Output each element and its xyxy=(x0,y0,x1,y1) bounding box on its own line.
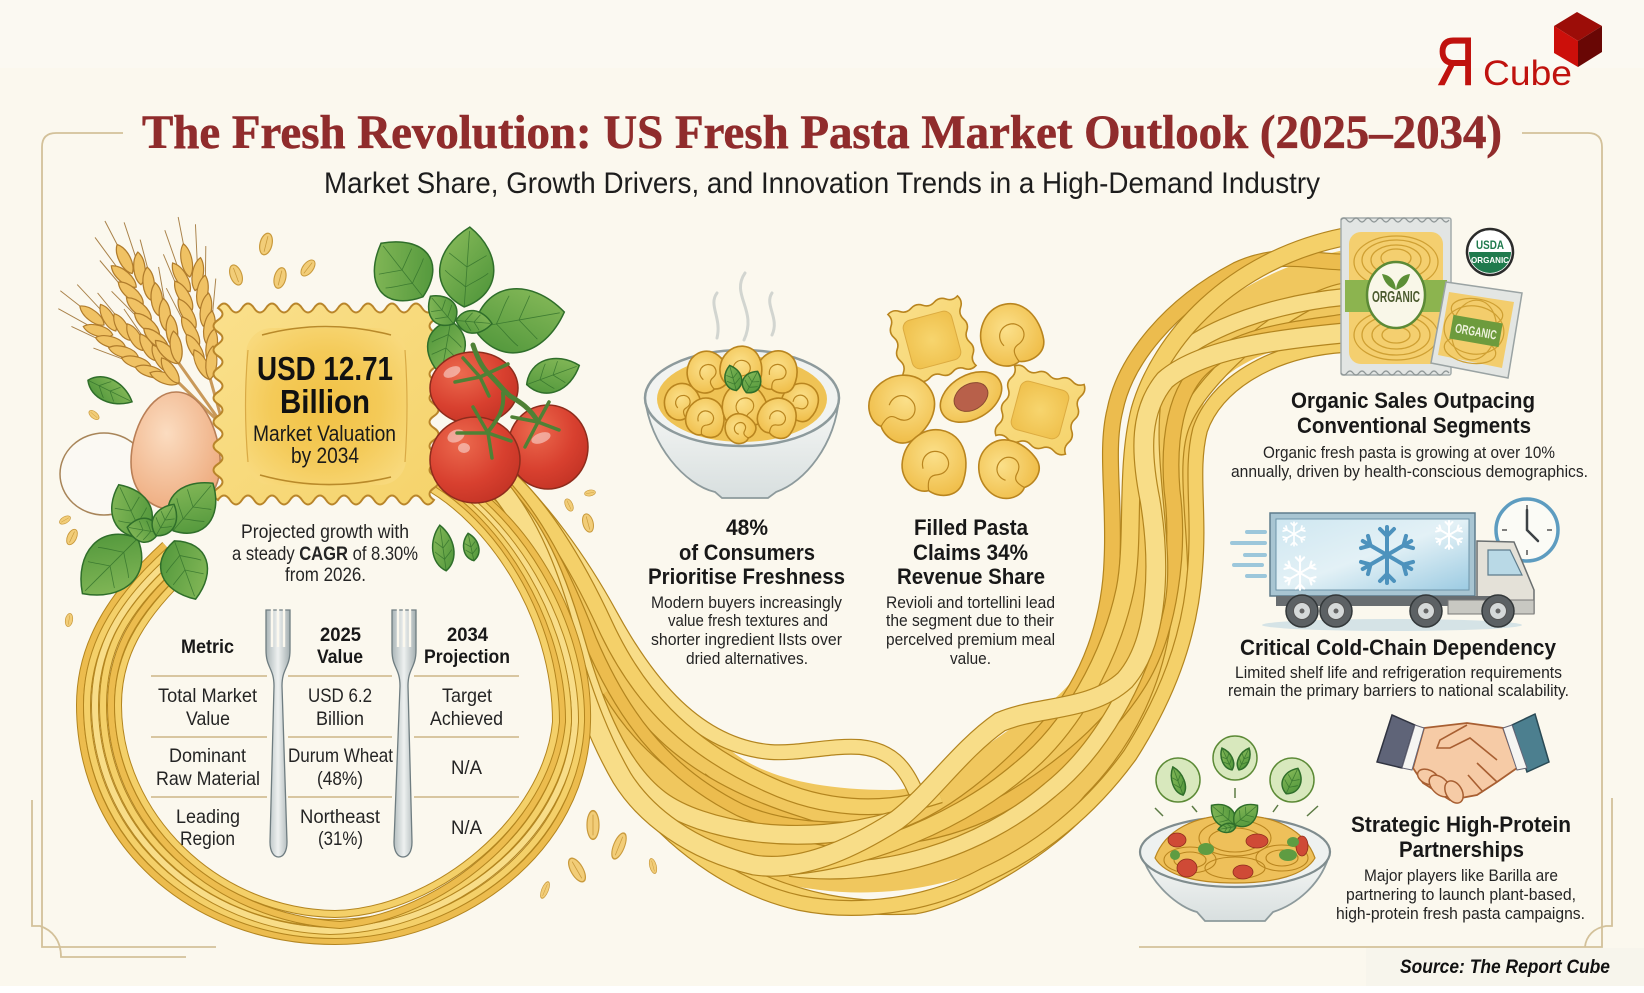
row: leading region: Leading xyxy=(176,806,240,828)
text: filled pasta: Revenue Share xyxy=(897,564,1045,589)
pack label xyxy=(1367,262,1425,328)
tomato bits xyxy=(1168,833,1308,879)
row: raw material: Dominant xyxy=(169,745,247,767)
table rules xyxy=(151,676,519,797)
basil garnish xyxy=(1205,798,1264,834)
row: leading region xyxy=(176,806,482,850)
bowl body xyxy=(1141,852,1330,921)
small pack: ORGANIC xyxy=(1454,320,1498,343)
table header: Value xyxy=(317,646,363,668)
wheat xyxy=(45,209,235,428)
row: raw material: Durum Wheat xyxy=(288,745,393,767)
vine and calyx xyxy=(455,345,559,458)
ravioli value badge xyxy=(214,304,438,504)
row: total market value: Target xyxy=(442,685,493,707)
row: total market value: Achieved xyxy=(430,708,503,730)
text: filled pasta: value. xyxy=(950,650,991,668)
row: leading region: (31%) xyxy=(318,828,363,850)
row: leading region: Region xyxy=(180,828,235,850)
green bits xyxy=(1170,837,1299,861)
icon: organic packages xyxy=(1341,218,1522,378)
USDA seal xyxy=(1467,229,1513,275)
table header: Projection xyxy=(424,646,510,668)
text: filled pasta: Claims 34% xyxy=(913,540,1028,565)
text: freshness: shorter ingredient lIsts over xyxy=(651,631,842,649)
text: freshness: Prioritise Freshness xyxy=(648,564,845,589)
clock xyxy=(1496,499,1558,561)
tomato front xyxy=(430,417,520,503)
thumb creases xyxy=(1437,725,1497,792)
truck shadow xyxy=(1262,619,1522,631)
source box xyxy=(1366,948,1644,986)
row: leading region: Northeast xyxy=(300,806,381,828)
USDA seal: USDA xyxy=(1476,240,1504,252)
icon: steam xyxy=(714,273,774,340)
left sleeve xyxy=(1377,715,1415,768)
wheels xyxy=(1286,595,1514,627)
ravioli text: Billion xyxy=(280,383,370,420)
tomatoes xyxy=(430,345,588,503)
snowflakes xyxy=(1282,521,1463,590)
fingers xyxy=(1415,766,1467,806)
text: filled pasta: the segment due to their xyxy=(886,612,1054,630)
bowl body xyxy=(645,398,839,498)
table header: 2034 xyxy=(447,624,488,646)
large pack: ORGANIC xyxy=(1372,289,1420,306)
logo xyxy=(1436,12,1602,100)
hands xyxy=(1413,723,1517,800)
title: The Fresh Revolution: US Fresh Pasta Market Outlook (2025–2034) xyxy=(142,106,1502,159)
chassis xyxy=(1276,596,1500,606)
small pack xyxy=(1431,282,1522,378)
accent leaves xyxy=(429,524,481,572)
text: filled pasta: Revioli and tortellini lead xyxy=(886,594,1055,612)
fork right xyxy=(392,606,416,857)
text: organic: Conventional Segments xyxy=(1297,413,1531,438)
white egg xyxy=(60,433,148,515)
text: partnerships: Strategic High-Protein xyxy=(1351,812,1571,837)
table header: Metric xyxy=(181,636,234,658)
dashes xyxy=(1155,788,1318,816)
row: total market value: Total Market xyxy=(158,685,258,707)
row: raw material: (48%) xyxy=(317,768,363,790)
pasta loop around table xyxy=(80,470,587,941)
row: total market value xyxy=(158,685,503,730)
text: cold chain: Limited shelf life and refrigeration requirements xyxy=(1235,664,1562,682)
text: cold chain: remain the primary barriers to national scalability. xyxy=(1228,682,1569,700)
top light band xyxy=(0,0,1644,68)
text: organic: Organic fresh pasta is growing at over 10% xyxy=(1263,444,1555,462)
tomato back xyxy=(430,352,518,424)
right sleeve xyxy=(1512,714,1549,772)
text: partnerships: high-protein fresh pasta campaigns. xyxy=(1336,905,1585,923)
text: partnerships: Major players like Barilla are xyxy=(1364,867,1558,885)
row: total market value: USD 6.2 xyxy=(308,685,372,707)
ravioli edge xyxy=(214,304,438,504)
growth note xyxy=(232,521,418,586)
ravioli pillow xyxy=(246,328,406,485)
text: partnerships: partnering to launch plant-based, xyxy=(1346,886,1576,904)
row: total market value: Value xyxy=(186,708,230,730)
subtitle: Market Share, Growth Drivers, and Innovation Trends in a High-Demand Industry xyxy=(324,167,1320,200)
growth note: from 2026. xyxy=(285,564,366,586)
text: freshness: value fresh textures and xyxy=(668,612,828,630)
table header xyxy=(181,624,510,668)
large pack xyxy=(1341,218,1451,375)
text: filled pasta xyxy=(886,515,1055,668)
basil top xyxy=(357,225,585,400)
ravioli text: Market Valuation xyxy=(253,421,396,446)
text: filled pasta: percelved premium meal xyxy=(886,631,1055,649)
logo word: Cube xyxy=(1483,54,1572,93)
text: organic: Organic Sales Outpacing xyxy=(1291,388,1535,413)
herb bubbles xyxy=(1156,736,1314,802)
row: leading region: N/A xyxy=(451,817,482,839)
bottom white strip xyxy=(0,986,1644,993)
ravioli text: USD 12.71 xyxy=(257,350,393,387)
speed lines xyxy=(1232,532,1265,576)
data table xyxy=(151,606,519,857)
cargo box xyxy=(1270,513,1475,596)
icon: tortellini bowl xyxy=(645,343,839,498)
growth note: Projected growth with xyxy=(241,521,409,543)
small leaf left xyxy=(83,370,137,412)
spaghetti heap xyxy=(1155,815,1315,883)
ravioli text: by 2034 xyxy=(291,443,359,468)
ravioli text xyxy=(253,350,396,468)
eggs xyxy=(60,392,220,515)
table header: 2025 xyxy=(320,624,361,646)
text: organic: annually, driven by health-conscious demographics. xyxy=(1231,463,1588,481)
pack band xyxy=(1345,280,1447,312)
row: raw material xyxy=(156,745,482,790)
tomato highlights xyxy=(442,364,552,453)
text: cold chain xyxy=(1228,635,1569,700)
text: cold chain: Critical Cold-Chain Dependency xyxy=(1240,635,1557,660)
bowl rim xyxy=(1140,817,1330,887)
fork left xyxy=(266,606,290,857)
bowl rim xyxy=(645,350,839,446)
icon: refrigerated truck xyxy=(1232,499,1558,631)
logo cube xyxy=(1554,12,1602,67)
text: organic xyxy=(1231,388,1588,481)
meat filling pasta xyxy=(931,361,1011,433)
text: freshness: dried alternatives. xyxy=(686,650,808,668)
growth note: a steady CAGR of 8.30% xyxy=(232,543,418,565)
USDA seal: ORGANIC xyxy=(1471,255,1509,265)
text: partnerships: Partnerships xyxy=(1399,837,1524,862)
cuffs xyxy=(1402,725,1527,770)
source note: Source: The Report Cube xyxy=(1400,957,1610,978)
decorative frame xyxy=(32,133,1612,957)
cab xyxy=(1477,541,1534,613)
icon: filled pasta cluster xyxy=(858,293,1087,508)
row: total market value: Billion xyxy=(316,708,364,730)
icon: plant based pasta bowl xyxy=(1140,736,1330,921)
text: freshness: of Consumers xyxy=(679,540,815,565)
logo letter: Я xyxy=(1436,24,1475,100)
text: freshness xyxy=(648,515,845,668)
text: partnerships xyxy=(1336,812,1585,923)
brown egg xyxy=(131,392,220,510)
text: freshness: Modern buyers increasingly xyxy=(651,594,843,612)
text: freshness: 48% xyxy=(726,515,768,540)
row: raw material: N/A xyxy=(451,757,482,779)
tomato right xyxy=(508,405,588,489)
pasta S-curve bundle xyxy=(480,237,1344,908)
icon: handshake xyxy=(1377,714,1549,806)
pillow seams xyxy=(260,326,391,485)
text: filled pasta: Filled Pasta xyxy=(914,515,1029,540)
basil bottom xyxy=(63,469,230,613)
loose grains xyxy=(58,232,658,899)
row: raw material: Raw Material xyxy=(156,768,260,790)
bowl pasta xyxy=(657,343,827,448)
